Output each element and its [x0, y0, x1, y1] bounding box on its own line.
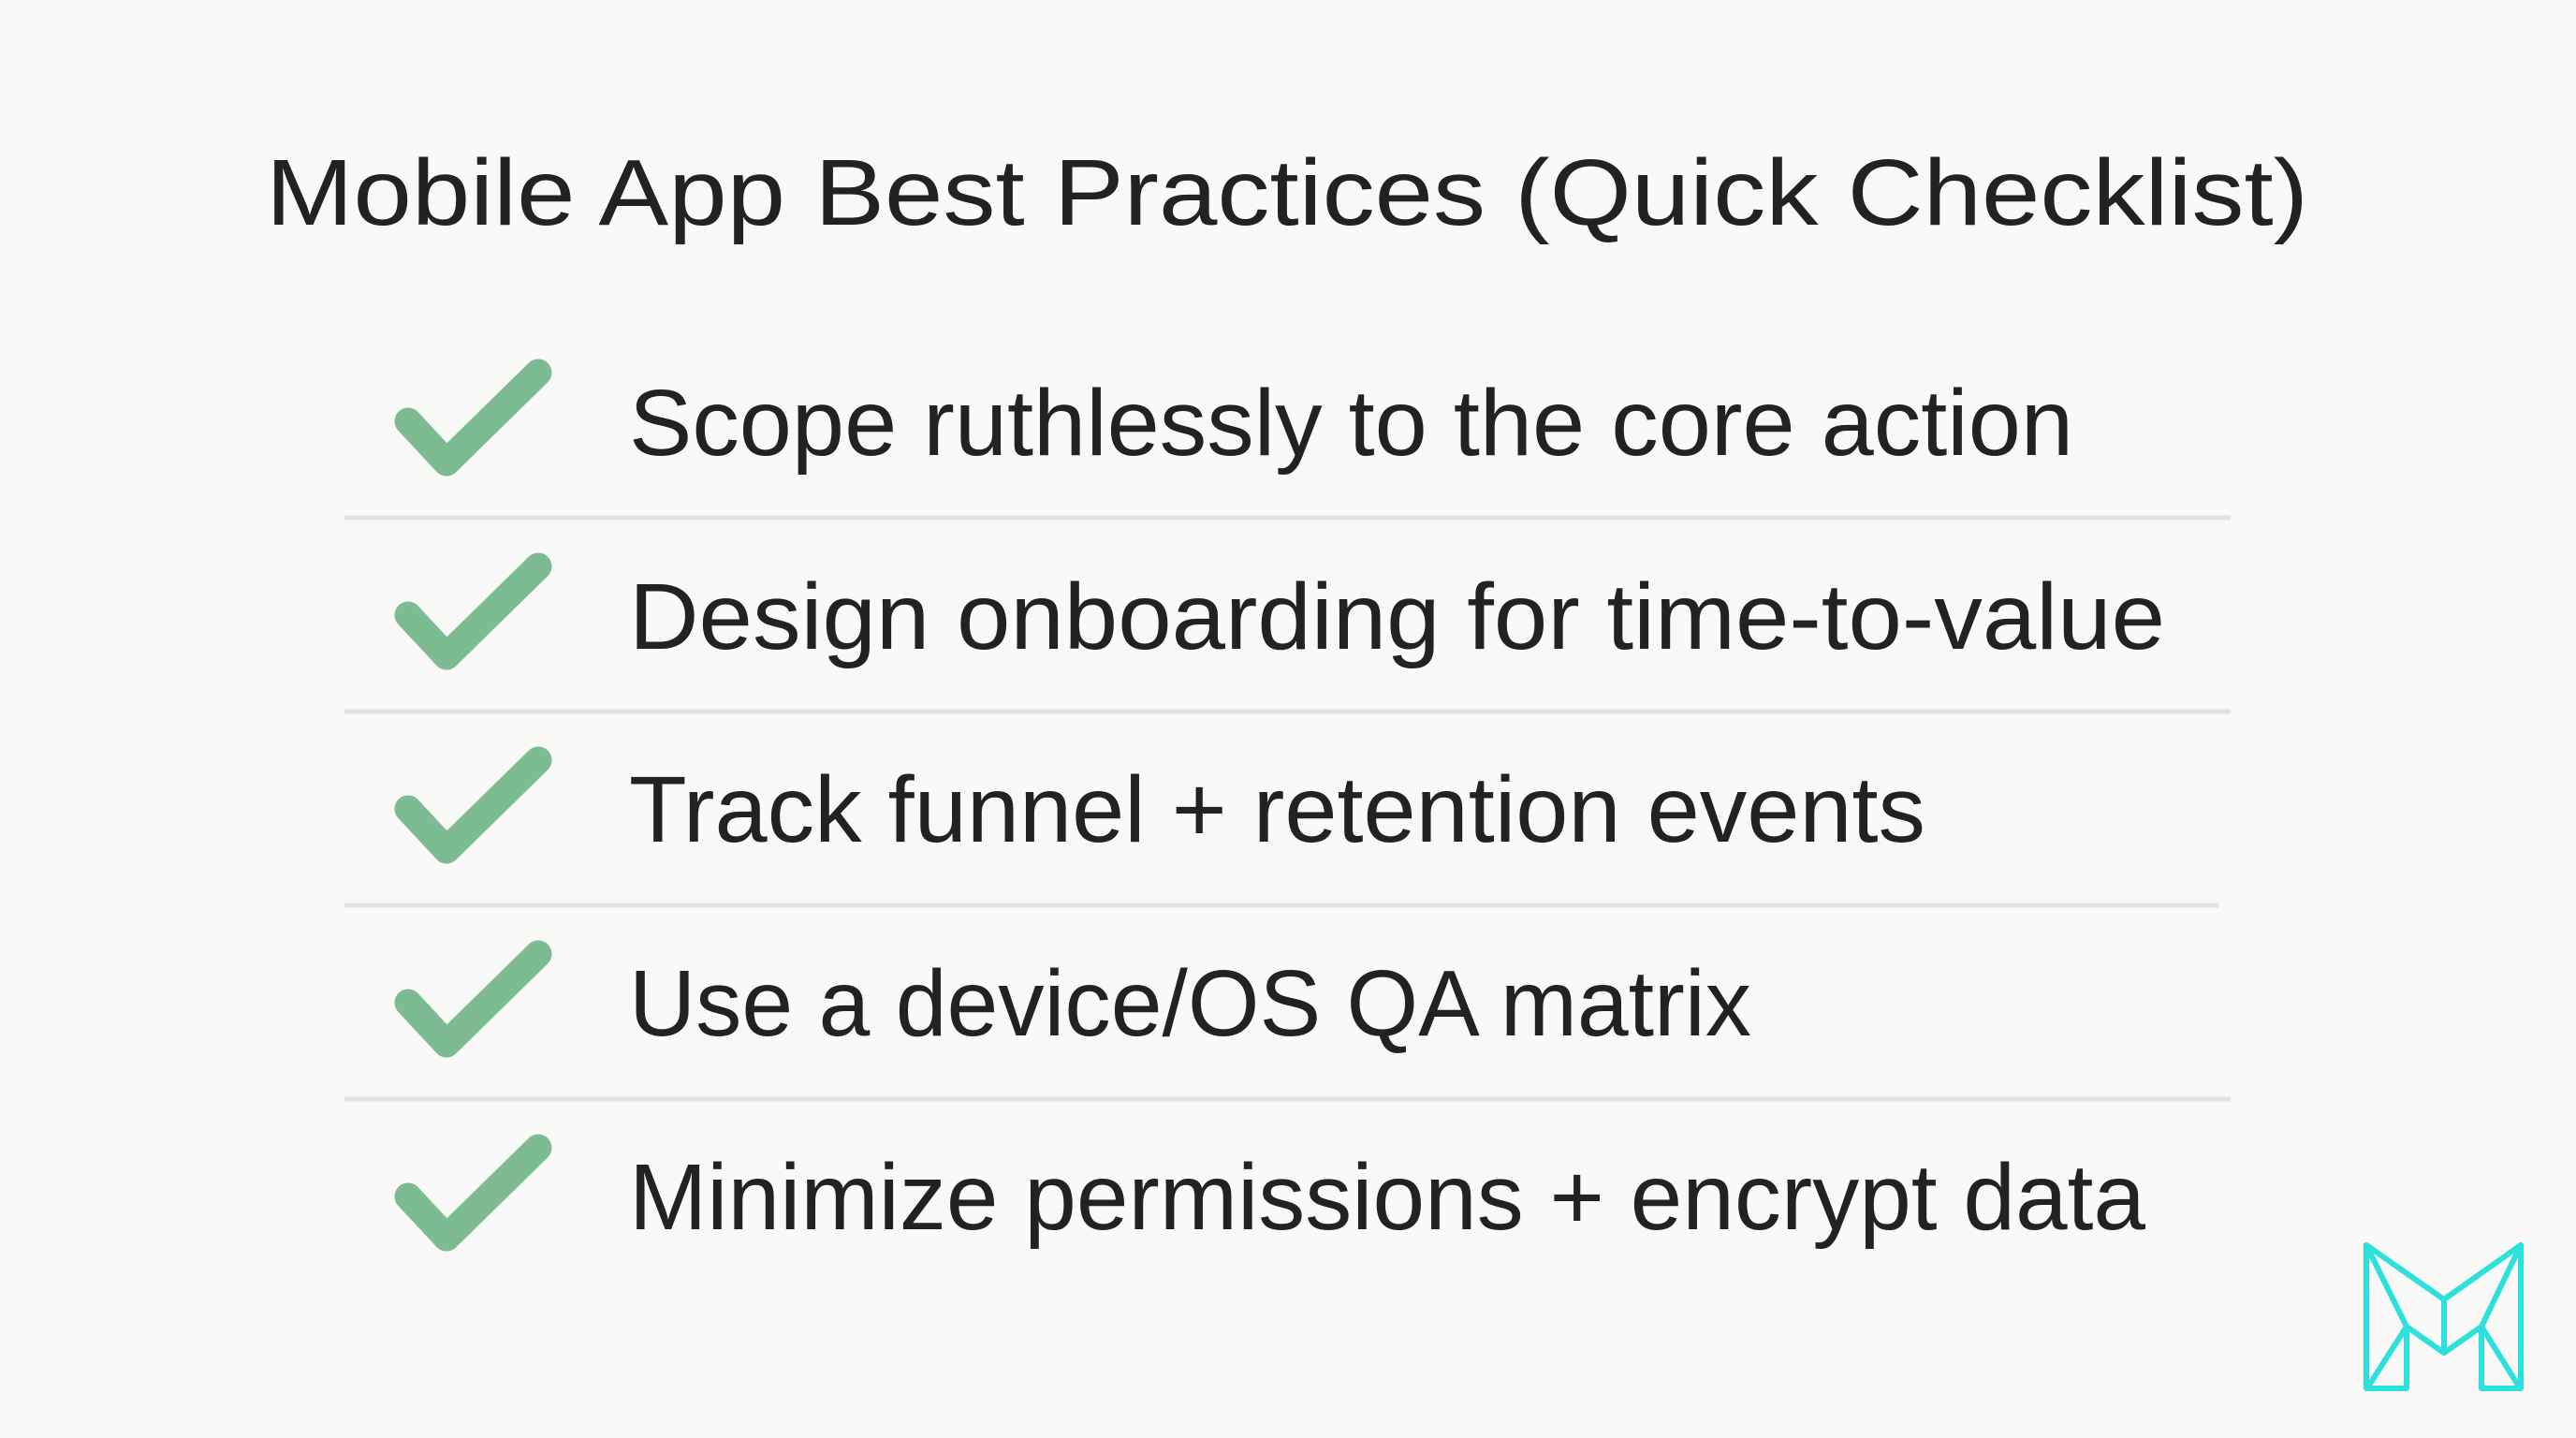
- icon: check 2: [408, 566, 538, 656]
- logo: M: [2366, 1245, 2521, 1388]
- checklist item 1: Scope ruthlessly to the core action: [629, 371, 2073, 476]
- icon: check 5: [408, 1148, 538, 1238]
- icon: check 1: [408, 373, 538, 462]
- title: Mobile App Best Practices (Quick Checklist): [266, 140, 2308, 245]
- checklist item 2: Design onboarding for time-to-value: [629, 565, 2165, 669]
- icon: check 4: [408, 954, 538, 1044]
- icon: check 3: [408, 760, 538, 850]
- checklist item 5: Minimize permissions + encrypt data: [629, 1145, 2145, 1250]
- checklist item 3: Track funnel + retention events: [629, 757, 1925, 862]
- checklist item 4: Use a device/OS QA matrix: [629, 951, 1751, 1056]
